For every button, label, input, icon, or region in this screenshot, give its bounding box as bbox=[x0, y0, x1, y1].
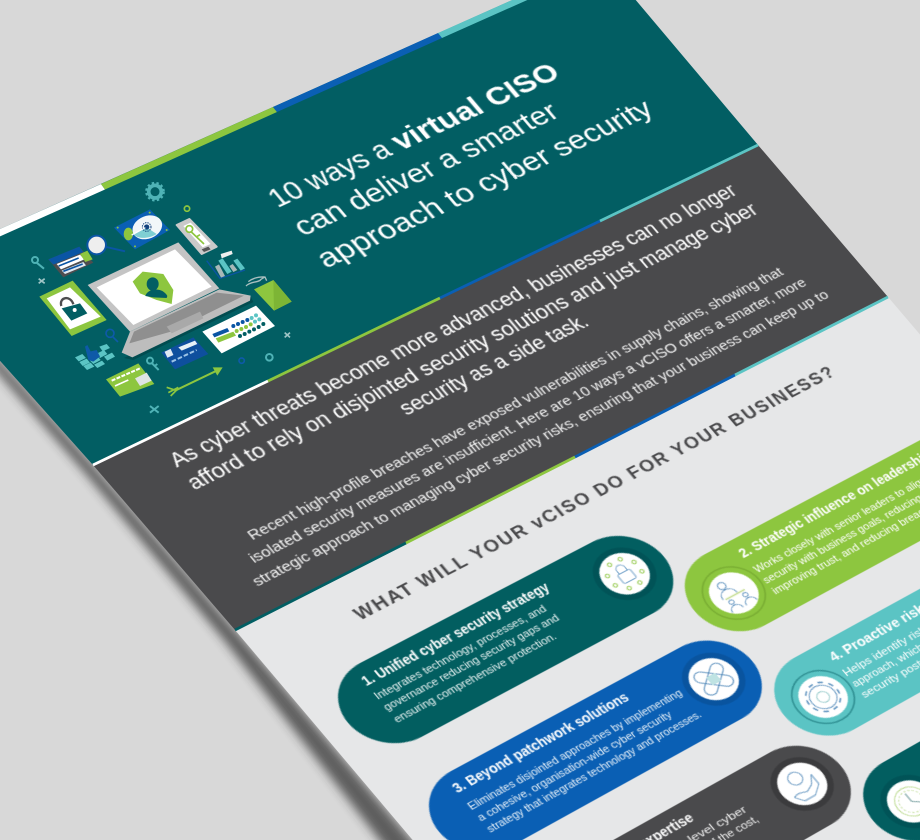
title bbox=[259, 36, 660, 274]
icon: arrow bbox=[167, 367, 223, 396]
icon: hard disk bbox=[114, 209, 170, 249]
icon: leadership people bbox=[690, 557, 778, 629]
card 3: beyond patchwork: a cohesive, organisation-wide cyber security bbox=[472, 722, 687, 819]
icon: gear bbox=[779, 661, 867, 733]
title: virtual CISO bbox=[402, 61, 604, 163]
panel: header background bbox=[0, 0, 758, 465]
card 1: unified strategy: 1. Unified cyber security strategy bbox=[357, 591, 564, 687]
icon: hand holding person bbox=[758, 747, 847, 821]
icon: blue small key bbox=[106, 329, 118, 342]
title: can deliver a smarter bbox=[295, 103, 601, 249]
icon: laptop bbox=[88, 242, 253, 360]
card 3: beyond patchwork: Eliminates disjointed approaches by implementing bbox=[463, 702, 699, 808]
icon: dashboard card bbox=[202, 306, 275, 353]
intro lead paragraph: afford to rely on disjointed security solutions and just manage cyber bbox=[181, 212, 817, 494]
intro secondary paragraph: strategic approach to managing cyber security risks, ensuring that your business can keep up to bbox=[248, 307, 890, 588]
icon: phone with key bbox=[177, 219, 217, 254]
intro bottom colour stripe bbox=[235, 297, 888, 630]
icon: clock bbox=[868, 765, 920, 838]
icon: teal key bottom bbox=[147, 358, 159, 370]
intro secondary paragraph: Recent high-profile breaches have exposed vulnerabilities in supply chains, showing that bbox=[244, 282, 840, 544]
intro lead paragraph: As cyber threats become more advanced, businesses can no longer bbox=[164, 192, 794, 472]
panel: intro background bbox=[93, 145, 888, 630]
icon: firewall bricks with hand bbox=[75, 344, 115, 370]
header bottom colour stripe bbox=[93, 145, 758, 465]
card 2: strategic influence bbox=[665, 418, 920, 647]
icon: crossed plasters bbox=[669, 643, 758, 716]
card 3: beyond patchwork bbox=[408, 625, 782, 840]
intro lead paragraph: security as a side task. bbox=[403, 324, 621, 429]
icon: login window bbox=[48, 247, 93, 277]
card 3: beyond patchwork: 3. Beyond patchwork solutions bbox=[447, 701, 643, 792]
card 1: unified strategy: ensuring comprehensive protection. bbox=[390, 641, 568, 722]
icon: gear bbox=[146, 183, 164, 200]
page drop shadow bbox=[0, 266, 425, 840]
icon: cross marks bbox=[39, 279, 290, 413]
title: 10 ways a bbox=[269, 140, 417, 220]
card 1: unified strategy bbox=[317, 521, 693, 760]
intro secondary paragraph: isolated security measures are insufficient. Here are 10 ways a vCISO offers a smarter, more bbox=[245, 294, 865, 566]
icon: network padlock bbox=[580, 538, 669, 610]
icon: green shield with user bbox=[133, 272, 173, 304]
icon: green credit card bbox=[106, 363, 154, 397]
title: approach to cyber security bbox=[318, 100, 707, 282]
card 4: proactive risk bbox=[754, 518, 920, 752]
icon: small green ring bbox=[184, 206, 190, 211]
card 6: teal bbox=[843, 619, 920, 840]
panel: body background bbox=[235, 297, 920, 840]
icon: bar chart bbox=[207, 251, 245, 278]
card 1: unified strategy: Integrates technology, processes, and bbox=[371, 614, 558, 700]
icon: tablet with padlock bbox=[39, 281, 107, 336]
icon: green drive with cable bbox=[246, 277, 292, 311]
section heading: WHAT WILL YOUR vCISO DO FOR YOUR BUSINESS? bbox=[350, 385, 891, 626]
icon: magnifier bbox=[87, 236, 125, 254]
icon: teal key left bbox=[32, 257, 44, 269]
card 3: beyond patchwork: strategy that integrates technology and processes. bbox=[482, 723, 718, 830]
top colour stripe bbox=[0, 0, 606, 272]
icon: blue payment card bbox=[161, 337, 208, 369]
card 1: unified strategy: governance reducing security gaps and bbox=[380, 624, 572, 711]
icon: rings bbox=[239, 354, 273, 363]
card 5: expertise bbox=[499, 730, 871, 840]
